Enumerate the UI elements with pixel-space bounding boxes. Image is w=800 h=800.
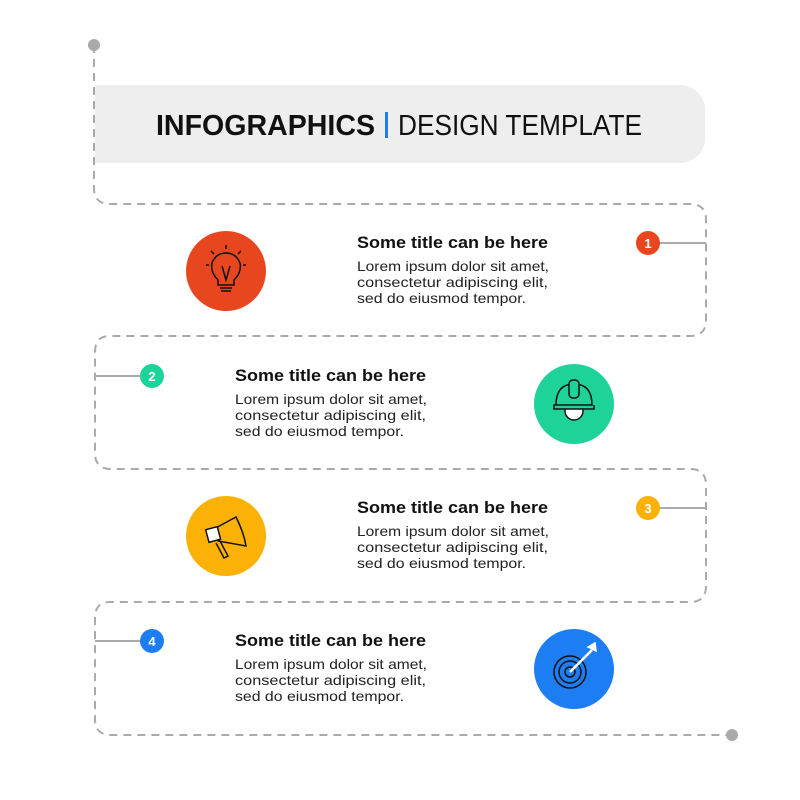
- dashed path: [94, 45, 732, 735]
- step 4: Lorem ipsum dolor sit amet,: [235, 656, 427, 672]
- step 3: 3: [644, 501, 652, 516]
- step 1: consectetur adipiscing elit,: [357, 274, 548, 290]
- step 3: [186, 496, 706, 576]
- step 1: Some title can be here: [357, 234, 548, 252]
- step 2: [95, 364, 614, 444]
- title: DESIGN TEMPLATE: [398, 110, 642, 142]
- start dot: [88, 39, 100, 51]
- icon: megaphone: [206, 517, 246, 558]
- step 4: 4: [148, 634, 156, 649]
- step 1: sed do eiusmod tempor.: [357, 290, 526, 306]
- step 1: [186, 231, 706, 311]
- step 4: consectetur adipiscing elit,: [235, 672, 426, 688]
- icon: target: [554, 643, 596, 688]
- title: INFOGRAPHICS: [156, 110, 375, 142]
- step 2: sed do eiusmod tempor.: [235, 423, 404, 439]
- step 2: 2: [148, 369, 156, 384]
- step 4: sed do eiusmod tempor.: [235, 688, 404, 704]
- title: [156, 110, 642, 142]
- step 1: Lorem ipsum dolor sit amet,: [357, 258, 549, 274]
- step 4: Some title can be here: [235, 632, 426, 650]
- icon: helmet gear: [554, 380, 594, 420]
- step 1: 1: [644, 236, 652, 251]
- step 3: Some title can be here: [357, 499, 548, 517]
- step 3: Lorem ipsum dolor sit amet,: [357, 523, 549, 539]
- icon: bulb: [206, 245, 246, 291]
- step 2: Lorem ipsum dolor sit amet,: [235, 391, 427, 407]
- step 3: consectetur adipiscing elit,: [357, 539, 548, 555]
- step 3: sed do eiusmod tempor.: [357, 555, 526, 571]
- step 4: [95, 629, 614, 709]
- end dot: [726, 729, 738, 741]
- step 2: Some title can be here: [235, 367, 426, 385]
- header panel: [95, 85, 705, 163]
- step 2: consectetur adipiscing elit,: [235, 407, 426, 423]
